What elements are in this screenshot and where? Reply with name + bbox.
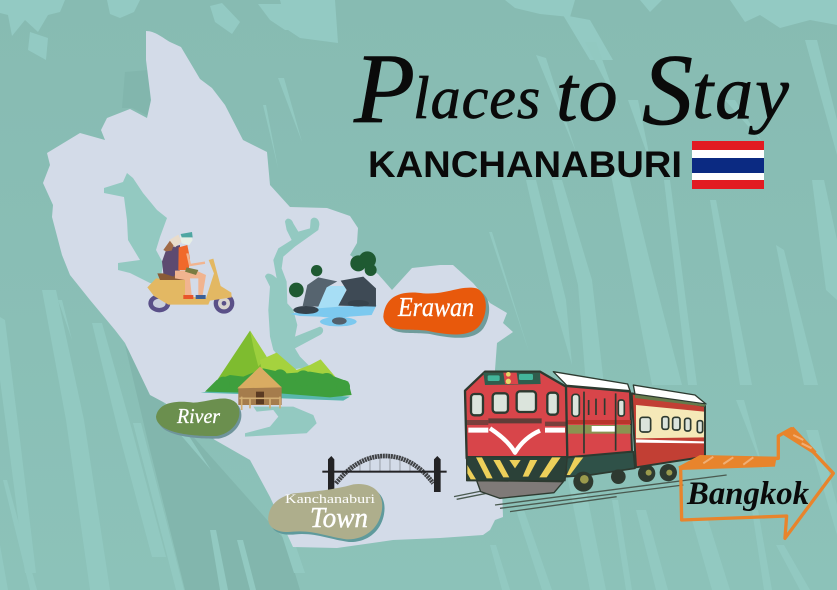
scooter riders illustration [147,232,234,314]
title: laces [413,65,541,131]
label: Kanchanaburi Town: Town [310,503,368,534]
arrow label: Bangkok [686,476,809,512]
river: central branch [265,218,323,370]
locomotive cab [465,372,567,458]
title: S [642,34,693,147]
tapered brush streaks [278,78,302,142]
label: River: River [176,404,221,428]
subtitle: KANCHANABURI [368,143,682,185]
label: Kanchanaburi Town: Kanchanaburi [285,491,375,506]
waterfall illustration [289,251,377,326]
tracks [454,475,727,512]
title: P [353,33,415,144]
bridge illustration [322,456,447,492]
skirt [477,481,563,498]
label: Erawan [383,288,489,338]
front carriage [565,386,632,457]
label: Kanchanaburi Town [268,484,385,542]
icon: Thai flag [692,141,764,189]
rear carriage [632,393,705,467]
label: Erawan: Erawan [397,292,474,322]
undercarriage [565,452,635,477]
title: to [556,50,619,137]
mountains and river hut illustration [201,331,352,410]
river: western reservoir [104,173,167,285]
label: River [156,398,241,439]
hazard stripes [467,457,567,481]
map of Kanchanaburi province [43,31,513,548]
river: lower branch [245,407,317,437]
arrow: Bangkok [678,427,833,538]
title: tay [692,51,791,135]
train illustration [454,372,727,512]
left side streaks [42,290,110,590]
